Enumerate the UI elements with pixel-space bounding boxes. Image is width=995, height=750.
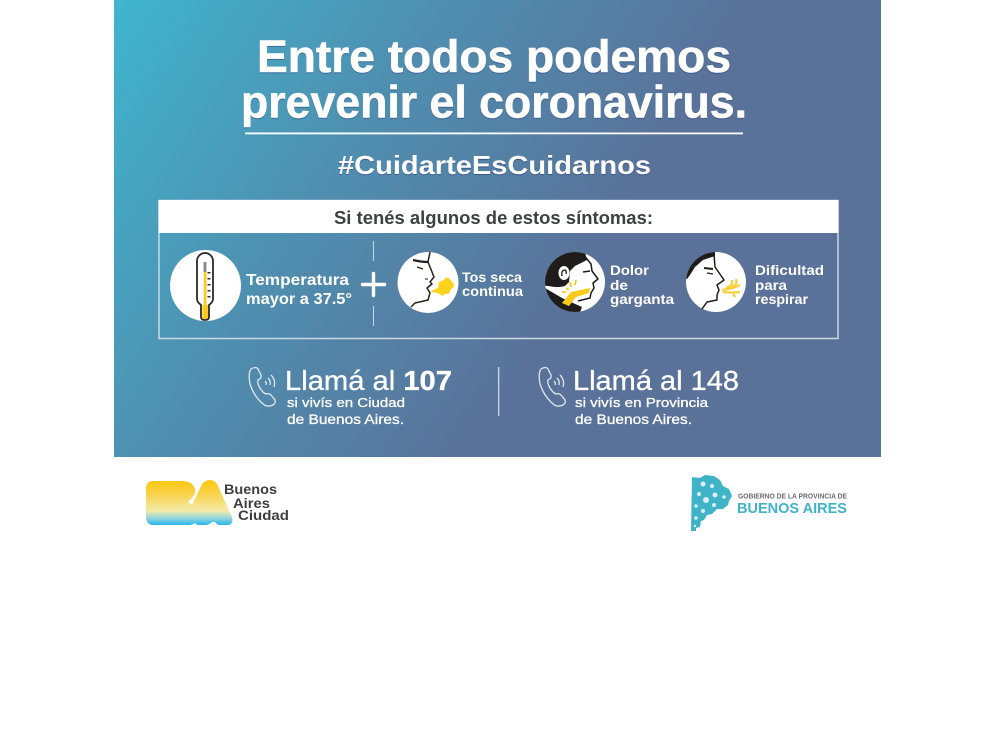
symptom text: dificultad para respirar: respirar	[755, 292, 809, 307]
call block: 148: Llamá al 148	[573, 365, 739, 396]
icon: phone 148	[539, 368, 565, 406]
symptom text: dificultad para respirar: para	[755, 278, 788, 293]
logo: Buenos Aires Ciudad: Ciudad	[238, 508, 289, 523]
logo: Buenos Aires Ciudad	[146, 480, 289, 525]
call block: 148: de Buenos Aires.	[575, 412, 692, 427]
logo: Buenos Aires Ciudad: Aires	[233, 496, 270, 511]
symptom text: temperatura: Temperatura	[246, 272, 349, 289]
logo: Gobierno de la Provincia de Buenos Aires	[691, 475, 847, 531]
title	[241, 31, 747, 128]
title: Entre todos podemos	[257, 31, 731, 82]
call block: 148: si vivís en Provincia	[575, 395, 709, 410]
call block: 148	[573, 365, 739, 427]
symptom text: dolor de garganta: Dolor	[610, 263, 650, 278]
symptoms heading	[158, 200, 838, 233]
logo: Gobierno de la Provincia de Buenos Aires: GOBIERNO DE LA PROVINCIA DE	[738, 492, 847, 500]
icon: thermometer	[170, 250, 241, 321]
symptom text: dificultad para respirar: Dificultad	[755, 263, 824, 278]
breath lines	[722, 279, 740, 297]
call block: 107: de Buenos Aires.	[287, 412, 404, 427]
symptom text: tos	[462, 270, 524, 299]
icon: dry cough face	[398, 252, 458, 313]
call block: 107: si vivís en Ciudad	[287, 395, 405, 410]
symptom text: tos: continua	[462, 284, 524, 299]
symptom text: dolor de garganta: de	[610, 278, 629, 293]
symptom text: tos: Tos seca	[462, 270, 523, 285]
panel: blue gradient background	[114, 0, 881, 457]
logo: Buenos Aires Ciudad: Buenos	[224, 482, 277, 497]
symptom text: dificultad para respirar	[755, 263, 824, 307]
icon: sore throat face	[545, 252, 605, 312]
ear	[558, 266, 570, 280]
icon: phone 107	[249, 368, 275, 406]
call block: 107: Llamá al 107	[285, 365, 452, 396]
symptom text: dolor de garganta: garganta	[610, 292, 675, 307]
panel: symptoms	[158, 200, 838, 338]
throat pain mark	[562, 288, 590, 306]
call block: 107	[285, 365, 452, 427]
icon: plus	[362, 274, 384, 296]
symptoms heading: Si tenés algunos de estos síntomas:	[334, 207, 653, 228]
hashtag: #CuidarteEsCuidarnos	[338, 150, 651, 180]
title: prevenir el coronavirus.	[241, 76, 747, 128]
cough puff	[431, 277, 454, 296]
symptom text: temperatura	[246, 272, 352, 308]
logo: Gobierno de la Provincia de Buenos Aires: BUENOS AIRES	[737, 500, 847, 517]
symptom text: dolor de garganta	[610, 263, 675, 307]
icon: breathing difficulty face	[685, 250, 746, 312]
symptom text: temperatura: mayor a 37.5°	[246, 291, 352, 308]
